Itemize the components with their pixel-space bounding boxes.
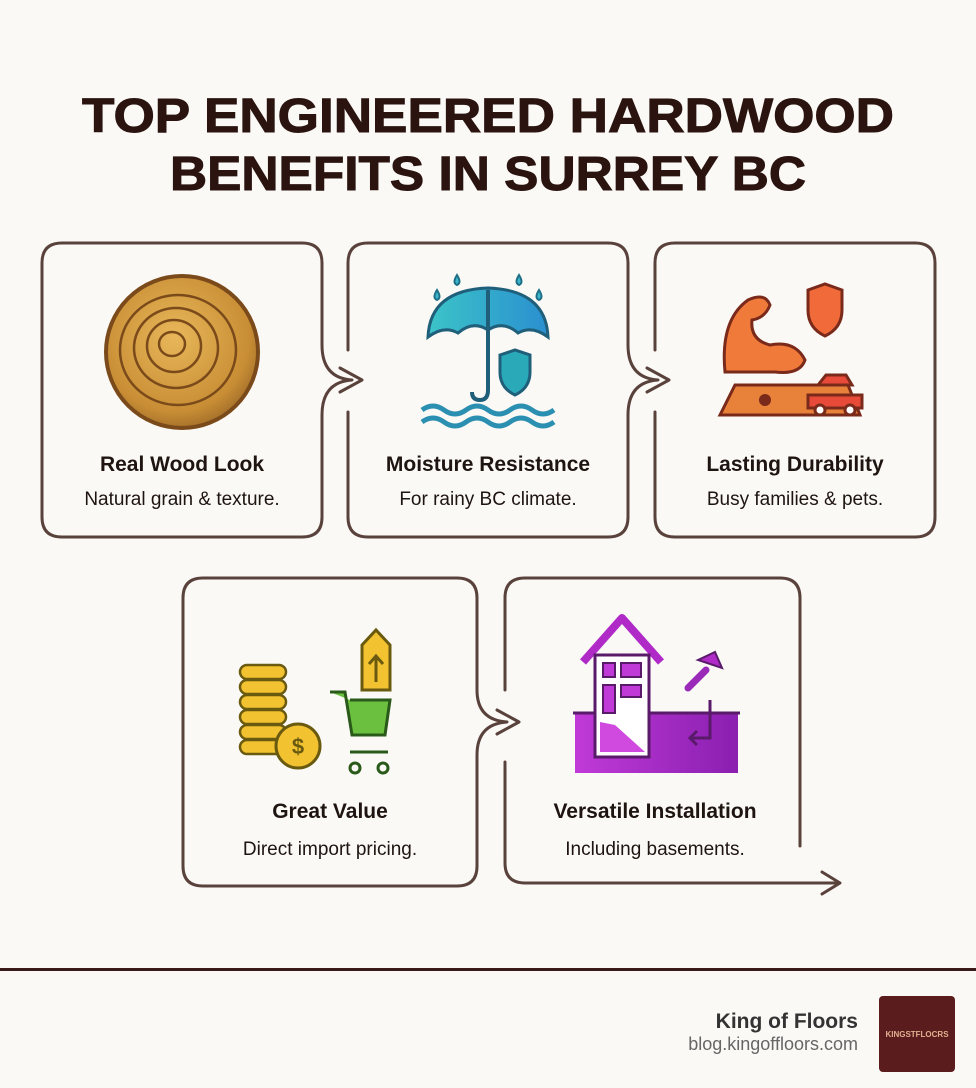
footer brand text — [688, 1010, 858, 1054]
text: lasting durability: Busy families & pets. — [707, 489, 883, 510]
title: TOP ENGINEERED HARDWOOD — [82, 90, 894, 143]
footer brand text: blog.kingoffloors.com — [688, 1034, 858, 1054]
text: real wood look: Real Wood Look — [100, 453, 264, 476]
panel: moisture resistance — [386, 275, 590, 510]
logo — [879, 996, 955, 1072]
icon: umbrella — [422, 275, 554, 426]
text: great value: Direct import pricing. — [243, 839, 417, 860]
icon: coins, cart, tag — [240, 630, 390, 773]
text: great value: Great Value — [272, 800, 388, 823]
title — [82, 90, 894, 201]
card frames and arrows — [42, 243, 935, 894]
text: moisture resistance — [386, 453, 590, 510]
logo: KINGSTFLOCRS — [885, 1030, 949, 1039]
text: great value — [243, 800, 417, 860]
panel: great value — [240, 630, 417, 860]
title: BENEFITS IN SURREY BC — [170, 148, 806, 201]
text: real wood look — [84, 453, 280, 510]
icon: wood slice — [106, 276, 258, 428]
icon: arm, shield, car, paw — [720, 284, 862, 415]
panel: versatile installation — [553, 618, 757, 860]
panel: real wood look — [84, 276, 280, 510]
text: versatile installation: Including basements. — [565, 839, 745, 860]
text: moisture resistance: Moisture Resistance — [386, 453, 590, 476]
text: lasting durability: Lasting Durability — [706, 453, 884, 476]
text: real wood look: Natural grain & texture. — [84, 489, 280, 510]
icon: house with basement — [573, 618, 740, 773]
text: versatile installation — [553, 800, 757, 860]
panel: lasting durability — [706, 284, 884, 510]
text: versatile installation: Versatile Installation — [553, 800, 757, 823]
footer brand text: King of Floors — [716, 1010, 858, 1033]
icon: coins, cart, tag: $ — [292, 734, 304, 759]
text: lasting durability — [706, 453, 884, 510]
text: moisture resistance: For rainy BC climate. — [399, 489, 577, 510]
